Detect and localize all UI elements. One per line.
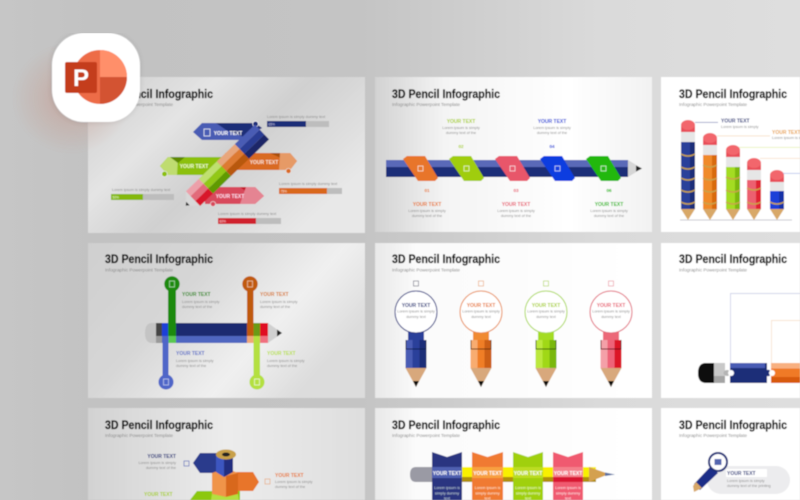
label: lime: Lorem ipsum is simply	[267, 359, 305, 363]
label 01	[408, 188, 446, 218]
label: orange: dummy text of the	[275, 485, 305, 489]
progress bar: red	[218, 212, 281, 224]
outline boxes	[730, 294, 800, 363]
ribbon 01	[403, 156, 438, 181]
label 06: YOUR TEXT	[595, 202, 623, 208]
pencil card: orange: Lorem ipsum is simply	[462, 310, 500, 314]
subtitle: Infographic Powerpoint Template	[105, 102, 174, 107]
magnifier	[709, 453, 727, 471]
orange hex body	[212, 468, 238, 497]
banner: navy	[432, 452, 462, 500]
label chip	[726, 469, 771, 488]
label: green: YOUR TEXT	[144, 492, 173, 498]
label chip: YOUR TEXT	[727, 471, 756, 477]
pencil card: navy	[395, 281, 437, 387]
label 03	[497, 188, 535, 218]
label: navy	[138, 454, 176, 470]
title: 3D Pencil Infographic	[105, 254, 214, 266]
panel: slide 8 horizontal pencil with banners	[375, 408, 652, 500]
progress bar: green: Lorem ipsum is simply dummy text	[112, 188, 171, 192]
icon: navy	[184, 461, 189, 466]
label: blue	[176, 351, 214, 368]
banner: navy: YOUR TEXT	[433, 471, 461, 477]
panel: slide 3 bar-chart pencils	[661, 77, 800, 232]
subtitle: Infographic Powerpoint Template	[679, 102, 748, 107]
banner: lime	[513, 452, 543, 500]
banner: lime: YOUR TEXT	[514, 471, 542, 477]
banner: navy: simply dummy	[435, 492, 459, 496]
title: 3D Pencil Infographic	[679, 89, 788, 101]
progress bar: green: 50%	[112, 196, 119, 200]
label: orange: Lorem ipsum is simply	[260, 300, 298, 304]
label 04: Lorem ipsum is simply	[533, 126, 571, 130]
ribbon: blue: YOUR TEXT	[214, 131, 242, 137]
ribbon: blue	[193, 121, 262, 140]
pencil: eraser segment	[698, 363, 730, 383]
pencil card: orange: dummy text	[471, 315, 492, 319]
progress bar: orange: Lorem ipsum is simply dummy text	[279, 182, 338, 186]
panel: slide 7 hexagonal pencil	[88, 408, 365, 500]
pencil card: orange: YOUR TEXT	[467, 303, 495, 309]
ribbon: red: YOUR TEXT	[216, 194, 244, 200]
panel: slide 9 pencil magnifier	[661, 408, 800, 500]
banner: lime: simply dummy	[516, 492, 540, 496]
green band	[190, 491, 240, 500]
label 04	[533, 119, 571, 149]
progress bar: red: Lorem ipsum is simply dummy text	[218, 212, 277, 216]
pencil bar 2	[703, 133, 717, 220]
pencil: blue segment	[728, 363, 771, 383]
label 01: Lorem ipsum is simply	[408, 209, 446, 213]
title: 3D Pencil Infographic	[392, 420, 501, 432]
pencil handle	[693, 466, 718, 492]
icon: PowerPoint app logo: P	[73, 65, 89, 92]
ribbon: orange	[225, 153, 297, 174]
banner: orange: Lorem ipsum is	[475, 486, 500, 490]
title: 3D Pencil Infographic	[392, 89, 501, 101]
pencil card: red	[590, 281, 632, 387]
title: 3D Pencil Infographic	[392, 254, 501, 266]
pencil bar 4	[747, 158, 761, 220]
pencil card: navy: dummy text	[406, 315, 427, 319]
label: green: YOUR TEXT	[182, 292, 211, 298]
connector: lime	[250, 323, 264, 390]
ribbon 03	[495, 156, 530, 181]
navy arrow	[193, 453, 218, 473]
leader lines and labels	[695, 118, 800, 174]
progress bar: red: 60%	[220, 220, 226, 224]
ribbon 06	[586, 156, 621, 181]
horizontal pencil	[386, 160, 642, 177]
label 02	[442, 119, 480, 149]
horizontal pencil	[145, 323, 282, 343]
icon: PowerPoint app logo	[52, 33, 140, 122]
label: orange: YOUR TEXT	[275, 473, 304, 479]
label: blue: YOUR TEXT	[176, 351, 205, 357]
subtitle: Infographic Powerpoint Template	[679, 268, 748, 272]
label 02: Lorem ipsum is simply	[442, 126, 480, 130]
label 03: YOUR TEXT	[502, 202, 530, 208]
pencil card: orange	[460, 281, 502, 387]
pencil card: red: YOUR TEXT	[597, 303, 625, 309]
connector: brown	[242, 276, 258, 343]
label 02: YOUR TEXT	[447, 119, 475, 125]
logo glow	[12, 42, 132, 154]
progress bar: navy	[267, 115, 329, 127]
leader lines and labels: YOUR TEXT	[772, 130, 800, 136]
pencil card: lime: Lorem ipsum is simply	[527, 310, 565, 314]
label 06: 06	[606, 188, 612, 193]
title: 3D Pencil Infographic	[679, 420, 788, 432]
label 02: dummy text of the	[446, 131, 476, 135]
subtitle: Infographic Powerpoint Template	[105, 268, 174, 272]
label 06: Lorem ipsum is simply	[590, 209, 628, 213]
label: blue: dummy text of the	[176, 364, 206, 368]
subtitle: Infographic Powerpoint Template	[105, 433, 174, 438]
subtitle: Infographic Powerpoint Template	[392, 433, 461, 438]
ribbon: green	[160, 157, 226, 177]
label 03: 03	[513, 188, 519, 193]
subtitle: Infographic Powerpoint Template	[392, 102, 461, 107]
label 01: dummy text of the	[412, 214, 442, 218]
progress bar: green	[111, 188, 174, 200]
icon: orange	[265, 479, 270, 484]
label: navy: Lorem ipsum is simply	[138, 461, 176, 465]
subtitle: Infographic Powerpoint Template	[392, 268, 461, 272]
leader lines and labels: YOUR TEXT	[721, 118, 750, 124]
title: 3D Pencil Infographic	[105, 89, 214, 101]
blue hex body	[216, 450, 236, 477]
label: green	[182, 292, 220, 309]
label 03: dummy text of the	[501, 214, 531, 218]
baseline	[680, 220, 792, 221]
pencil card: red: Lorem ipsum is simply	[592, 310, 630, 314]
panel: slide 4 crossing bars	[88, 243, 365, 398]
pencil bar 5	[770, 170, 784, 220]
label 03: Lorem ipsum is simply	[497, 209, 535, 213]
orange arrow	[232, 472, 259, 491]
banner: orange	[472, 452, 503, 500]
panel: slide 5 magnifier pencils	[375, 243, 652, 398]
label: orange: dummy text of the	[260, 305, 290, 309]
label: navy: YOUR TEXT	[147, 454, 176, 460]
lime hex body	[211, 494, 239, 500]
banner: pink	[553, 452, 583, 500]
label: lime	[267, 351, 305, 368]
ribbon 04	[540, 156, 575, 181]
label 02: 02	[458, 144, 464, 149]
label 01: YOUR TEXT	[413, 202, 441, 208]
banner: orange: YOUR TEXT	[473, 471, 502, 477]
label 01: 01	[424, 188, 430, 193]
ribbon: green: YOUR TEXT	[180, 164, 208, 170]
label: lime: dummy text of the	[267, 364, 297, 368]
banner: pink: YOUR TEXT	[554, 471, 582, 477]
progress bar: orange: 75%	[280, 190, 287, 194]
label: orange	[275, 473, 313, 489]
connector: blue	[158, 323, 174, 390]
label chip: Lorem ipsum is simply	[727, 479, 765, 483]
pencil bar 1	[681, 120, 695, 220]
title: 3D Pencil Infographic	[679, 254, 788, 266]
pencil card: lime: YOUR TEXT	[532, 303, 560, 309]
subtitle: Infographic Powerpoint Template	[679, 433, 748, 438]
pencil card: navy: YOUR TEXT	[402, 303, 430, 309]
pencil card: lime	[525, 281, 567, 387]
panel: slide 6 jigsaw pencil	[661, 243, 800, 398]
label 04: 04	[549, 144, 555, 149]
pencil bar 3	[726, 145, 740, 220]
progress bar: orange	[279, 182, 342, 194]
ribbon: red	[205, 187, 264, 207]
label chip: dummy text of the printing	[727, 484, 771, 488]
progress bar: navy: Lorem ipsum is simply dummy text	[267, 115, 326, 119]
label: orange: YOUR TEXT	[260, 292, 289, 298]
label: lime: YOUR TEXT	[267, 351, 296, 357]
ribbon: orange: YOUR TEXT	[250, 160, 278, 166]
label: orange: Lorem ipsum is simply	[275, 480, 313, 484]
banner: orange: simply dummy	[475, 492, 500, 496]
label: orange	[260, 292, 298, 309]
pencil card: lime: dummy text	[536, 315, 557, 319]
banner: lime: Lorem ipsum is	[515, 486, 541, 490]
banner: navy: Lorem ipsum is	[434, 486, 460, 490]
panel: slide 2 ribbon timeline	[375, 77, 652, 232]
ribbon 02	[449, 156, 484, 181]
label: navy: dummy text of the	[146, 466, 176, 470]
pencil card: red: dummy text	[601, 315, 622, 319]
label 04: dummy text of the	[537, 131, 567, 135]
label: blue: Lorem ipsum is simply	[176, 359, 214, 363]
diagonal pencil	[179, 125, 269, 213]
label 04: YOUR TEXT	[538, 119, 566, 125]
pencil: orange segment	[769, 363, 800, 383]
connector: green	[164, 276, 180, 343]
label: green: dummy text of the	[182, 305, 212, 309]
label 06: dummy text of the	[594, 214, 624, 218]
label: green: Lorem ipsum is simply	[182, 300, 220, 304]
label 06	[590, 188, 628, 218]
panel: slide 1 diagonal pencil	[88, 77, 365, 233]
banner: pink: simply dummy	[556, 492, 580, 496]
title: 3D Pencil Infographic	[105, 420, 214, 432]
leader lines and labels: Lorem ipsum is simply	[721, 125, 759, 129]
pencil card: navy: Lorem ipsum is simply	[397, 310, 435, 314]
grey pill	[707, 466, 790, 494]
progress bar: navy: 65%	[268, 122, 275, 126]
banner: pink: Lorem ipsum is	[555, 486, 581, 490]
pencil	[410, 467, 615, 482]
